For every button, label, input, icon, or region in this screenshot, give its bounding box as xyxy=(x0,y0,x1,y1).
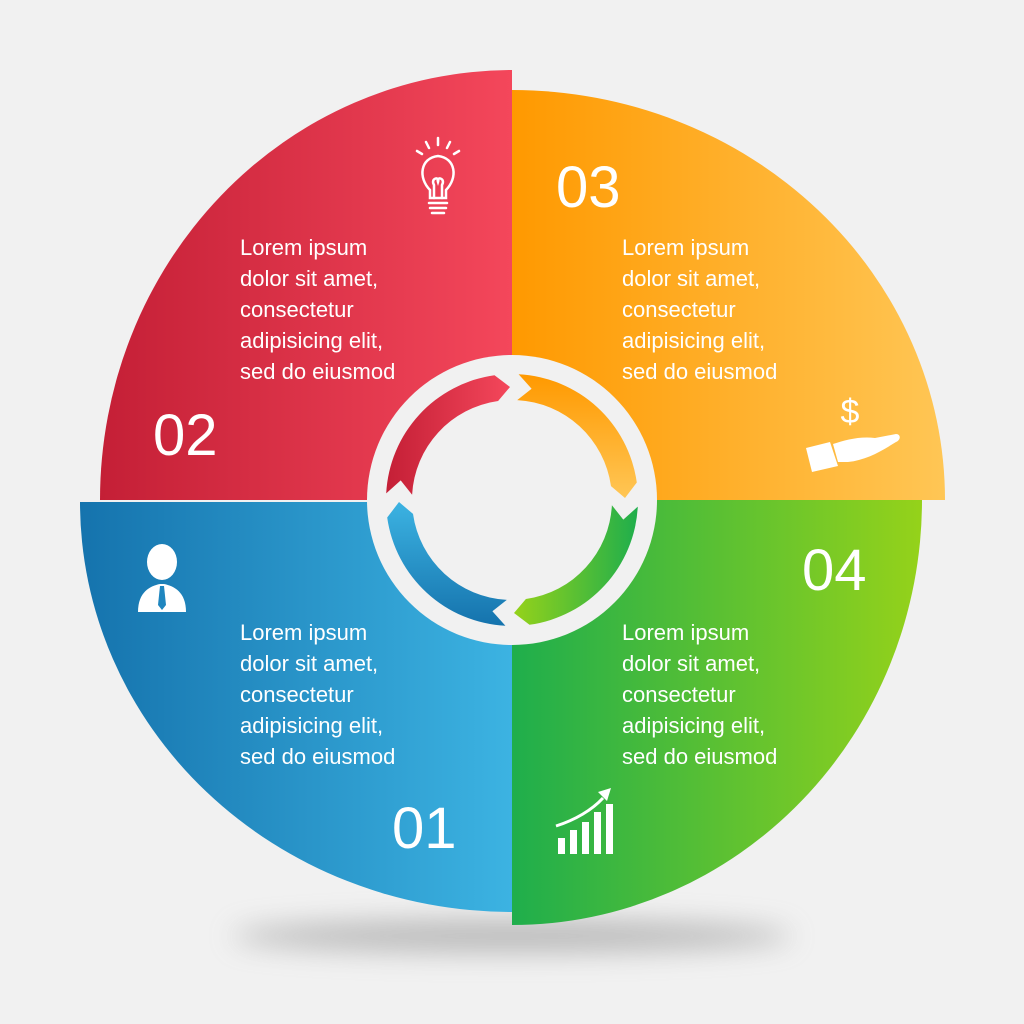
text: 04: dolor sit amet, xyxy=(622,651,760,676)
text: 03: adipisicing elit, xyxy=(622,328,765,353)
text: 01: consectetur xyxy=(240,682,354,707)
text: 03: dolor sit amet, xyxy=(622,266,760,291)
text: 04: consectetur xyxy=(622,682,736,707)
text: 01: sed do eiusmod xyxy=(240,744,395,769)
arrow: blue xyxy=(387,502,507,626)
number 03: 03 xyxy=(556,155,621,220)
icon: hand with dollar xyxy=(806,393,900,472)
text: 01: Lorem ipsum xyxy=(240,620,367,645)
number 04: 04 xyxy=(802,538,867,603)
panel: 04 green xyxy=(512,500,922,925)
arrow: orange xyxy=(517,374,637,498)
number 01: 01 xyxy=(392,796,457,861)
text: 02: sed do eiusmod xyxy=(240,359,395,384)
text: 04: Lorem ipsum xyxy=(622,620,749,645)
panel: 01 blue xyxy=(80,502,512,912)
center ring xyxy=(367,355,657,645)
arrow: red xyxy=(386,375,510,495)
text: 02: consectetur xyxy=(240,297,354,322)
text: 02: adipisicing elit, xyxy=(240,328,383,353)
icon: light bulb xyxy=(417,138,459,213)
shadow xyxy=(232,920,792,952)
text: 02: Lorem ipsum xyxy=(240,235,367,260)
number 02: 02 xyxy=(153,403,218,468)
text: 04: sed do eiusmod xyxy=(622,744,777,769)
icon: person xyxy=(138,544,186,612)
arrow: green xyxy=(514,505,638,625)
text: 03: consectetur xyxy=(622,297,736,322)
icon: hand with dollar: $ xyxy=(841,393,860,431)
text: 04: adipisicing elit, xyxy=(622,713,765,738)
text: 03: sed do eiusmod xyxy=(622,359,777,384)
icon: bar chart xyxy=(556,788,613,854)
text: 02: dolor sit amet, xyxy=(240,266,378,291)
text: 03: Lorem ipsum xyxy=(622,235,749,260)
panel: 02 red xyxy=(100,70,512,500)
panel: 03 orange xyxy=(512,90,945,500)
text: 01: dolor sit amet, xyxy=(240,651,378,676)
text: 01: adipisicing elit, xyxy=(240,713,383,738)
